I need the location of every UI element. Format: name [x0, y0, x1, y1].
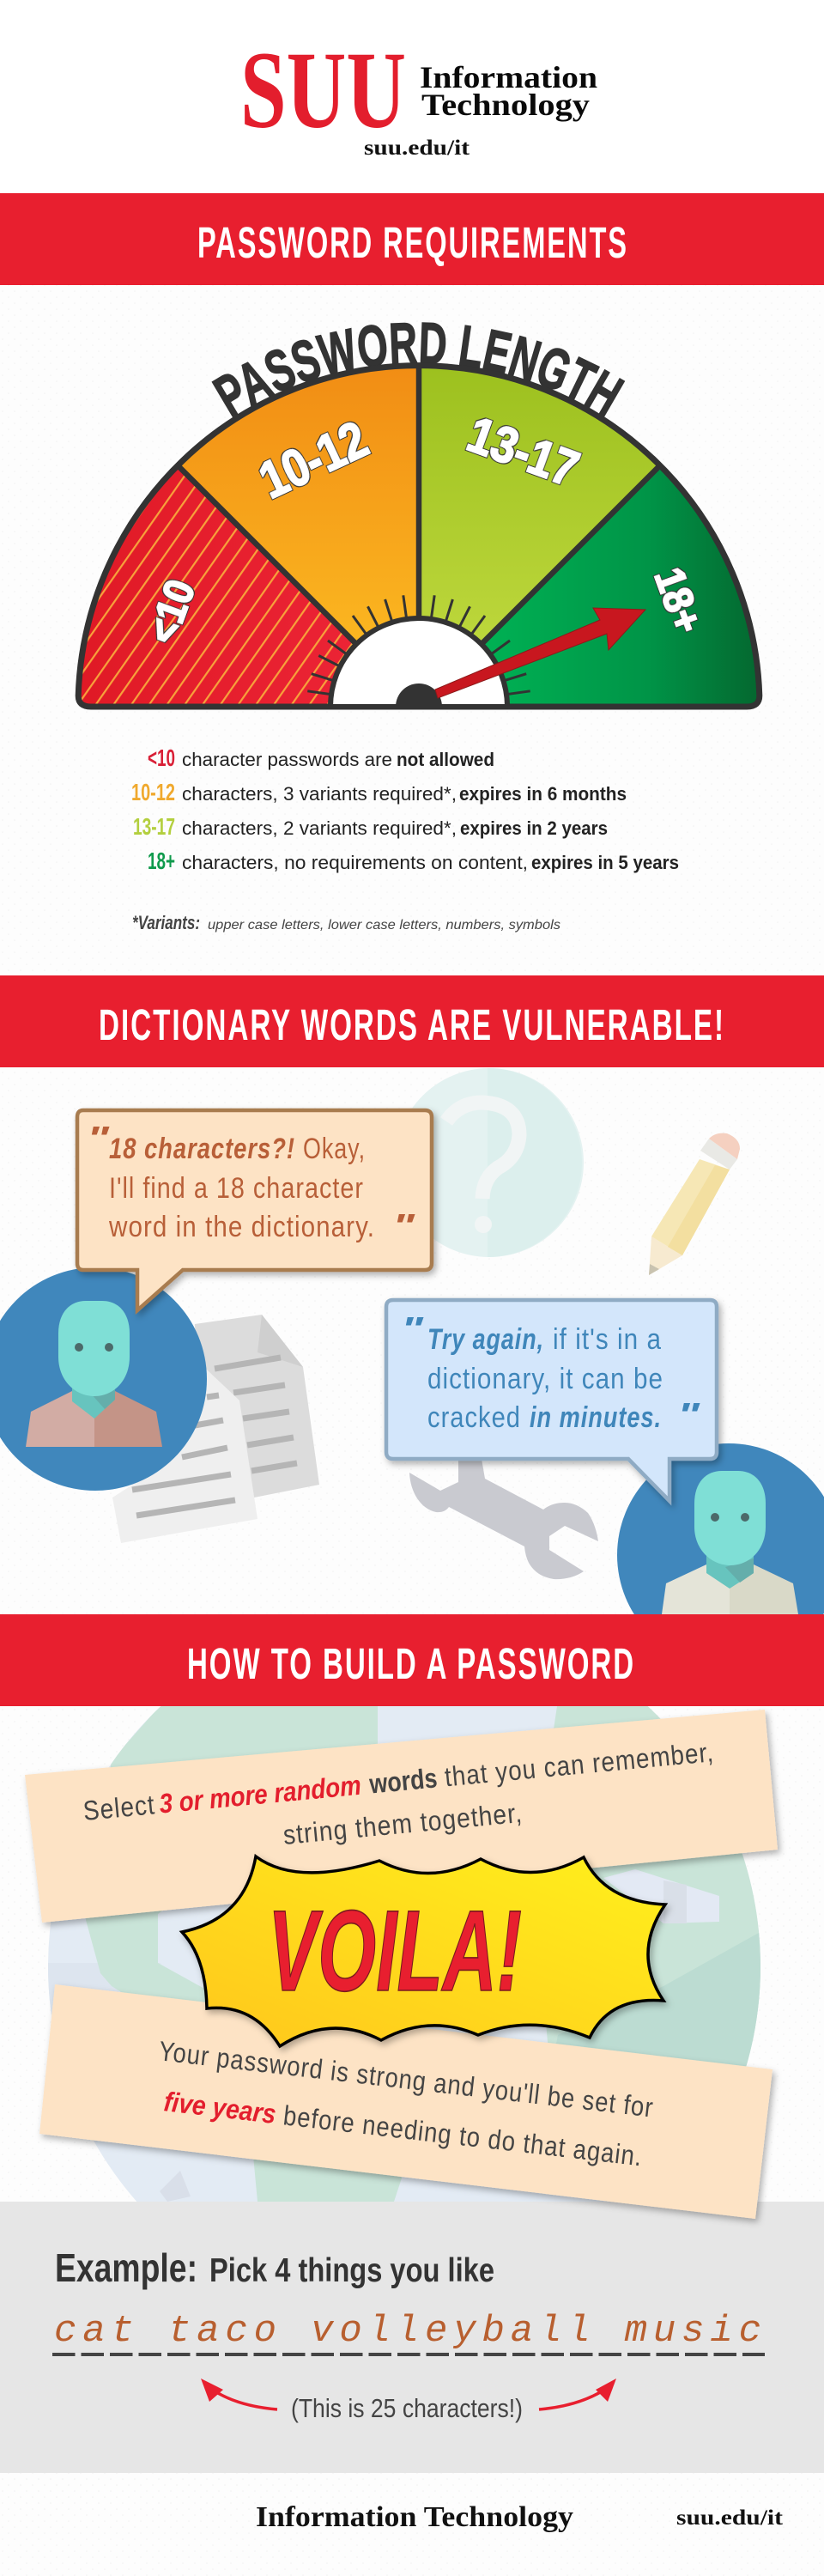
legend row: 10-12: 10-12: [131, 779, 175, 805]
attacker head: [58, 1301, 130, 1396]
helper quote text: if it's in a: [553, 1323, 662, 1356]
paper note: select words: [25, 1710, 778, 1923]
segment label: 13-17: 13-17: [460, 406, 586, 498]
legend row: 10-12: expires in 6 months: [459, 783, 627, 805]
legend row: 18+: 18+: [148, 848, 175, 874]
SUU wordmark: SUU: [240, 29, 406, 151]
gauge hub: [330, 618, 507, 707]
attacker shoulders: [26, 1391, 162, 1447]
attacker quote text: I'll find a 18 character: [109, 1172, 364, 1205]
header URL: suu.edu/it: [364, 137, 470, 160]
note text line 2: string them together,: [282, 1797, 524, 1850]
attacker quote text: word in the dictionary.: [108, 1211, 375, 1243]
attacker quote text: ": [392, 1208, 415, 1244]
icon: question mark circle: [395, 1068, 584, 1257]
paper note: result: [39, 1984, 772, 2219]
gauge tick marks: [307, 595, 530, 695]
starburst: voila: [182, 1856, 665, 2046]
helper neck: [706, 1556, 754, 1589]
example heading: [55, 2245, 494, 2290]
footer URL: suu.edu/it: [676, 2506, 784, 2530]
helper quote text: in minutes.: [530, 1401, 662, 1434]
helper quote text: dictionary, it can be: [427, 1363, 663, 1395]
Information Technology wordmark: Information: [420, 60, 597, 94]
helper quote text: [401, 1311, 700, 1434]
legend row: 13-17: expires in 2 years: [460, 817, 608, 839]
example panel background: [0, 2202, 824, 2473]
attacker eyes: [75, 1343, 113, 1352]
result text line 2: [162, 2086, 645, 2172]
gauge segments: [81, 368, 757, 704]
legend row: 13-17: characters, 2 variants required*,: [182, 817, 457, 839]
avatar: IT helper: [617, 1443, 824, 1614]
attacker quote text: 18 characters?!: [109, 1133, 295, 1165]
gauge dividers: [179, 367, 659, 707]
background globe: [34, 1706, 772, 2202]
arrow: left: [201, 2379, 277, 2409]
character dashes: [52, 2353, 765, 2356]
heading band: password requirements: [0, 193, 824, 285]
legend row: under 10: <10: [148, 744, 175, 771]
note text line 1: words: [367, 1762, 439, 1800]
helper quote text: ": [401, 1311, 424, 1347]
segment label: 10-12: 10-12: [251, 410, 376, 509]
icon: papers: [112, 1315, 319, 1543]
gauge chart: password length: [76, 322, 762, 709]
Information Technology wordmark: [420, 60, 597, 122]
Information Technology wordmark: Technology: [421, 88, 590, 122]
legend row: 13-17: 13-17: [133, 813, 175, 840]
footer: [256, 2501, 784, 2533]
segment label: 18+: 18+: [645, 562, 710, 639]
example panel content: [52, 2245, 765, 2423]
note text line 1: 3 or more random: [158, 1770, 362, 1820]
example password: cat taco volleyball music: [54, 2310, 761, 2353]
note text line 1: that you can remember,: [443, 1736, 715, 1792]
helper head: [694, 1471, 766, 1565]
header: white logo area: [0, 0, 824, 193]
variants footnote: upper case letters, lower case letters, numbers, symbols: [208, 918, 560, 933]
legend row: 13-17: [133, 813, 608, 840]
helper shoulders: [662, 1564, 798, 1614]
attacker quote text: [87, 1121, 415, 1244]
legend row: under 10: [148, 744, 494, 771]
result text line 2: five years: [162, 2086, 277, 2129]
helper quote text: Try again,: [427, 1323, 544, 1356]
attacker quote text: ": [87, 1121, 110, 1157]
attacker neck: [72, 1374, 115, 1419]
note text line 1: [82, 1736, 715, 1826]
example heading: Pick 4 things you like: [209, 2252, 494, 2289]
legend row: 10-12: characters, 3 variants required*,: [182, 783, 457, 805]
voila text: VOILA!: [268, 1887, 522, 2015]
speech bubble: attacker: [77, 1110, 432, 1310]
front sheet: [112, 1357, 258, 1543]
segment label: under 10: <10: [140, 574, 204, 649]
legend row: under 10: not allowed: [397, 749, 494, 770]
legend: length rules: [131, 744, 679, 874]
result text line 1: Your password is strong and you'll be set for: [157, 2035, 655, 2123]
helper quote text: cracked: [427, 1401, 521, 1434]
speech bubble: IT helper: [386, 1300, 717, 1501]
legend row: under 10: character passwords are: [182, 749, 392, 770]
gauge title on arc: PASSWORD LENGTH: [211, 322, 625, 417]
gauge needle arrow: [435, 608, 645, 698]
heading band: how to build a password: [0, 1614, 824, 1706]
variants footnote: *Variants:: [132, 912, 200, 933]
heading band: dictionary words: [0, 975, 824, 1067]
icon: pencil: [649, 1133, 740, 1275]
arrow: right: [539, 2379, 616, 2409]
example heading: Example:: [55, 2245, 197, 2290]
gauge outline: [78, 366, 760, 707]
attacker quote text: Okay,: [303, 1133, 366, 1165]
legend row: 18+: characters, no requirements on content,: [182, 852, 528, 873]
back sheet: [195, 1315, 319, 1498]
note text line 1: Select: [82, 1789, 156, 1826]
character count note: (This is 25 characters!): [291, 2393, 523, 2423]
avatar: attacker: [0, 1267, 207, 1491]
legend row: 10-12: [131, 779, 627, 805]
footer name: Information Technology: [256, 2501, 573, 2533]
legend row: 18+: expires in 5 years: [531, 852, 679, 873]
result text line 2: before needing to do that again.: [282, 2099, 645, 2172]
variants footnote: [132, 912, 560, 933]
legend row: 18+: [148, 848, 679, 874]
helper quote text: ": [677, 1397, 700, 1433]
icon: wrench: [409, 1459, 598, 1579]
helper eyes: [711, 1513, 749, 1522]
